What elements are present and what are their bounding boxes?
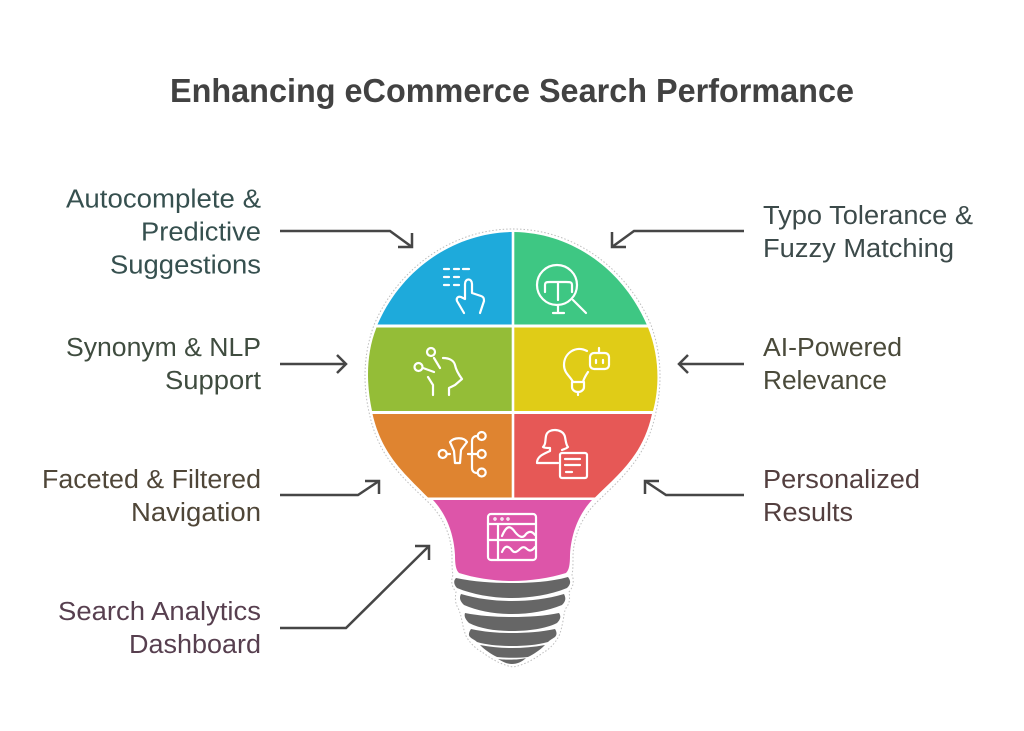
icon: person with document [537, 430, 587, 478]
label: search analytics: Search Analytics [58, 598, 261, 626]
icon: analytics dashboard window [488, 514, 536, 560]
arrow: typo tolerance [612, 231, 744, 247]
arrow: synonym [280, 355, 346, 373]
arrow: personalized [645, 481, 744, 495]
segment: search analytics (pink) [433, 500, 592, 581]
label: AI-powered: AI-Powered [763, 334, 902, 362]
label: fuzzy matching: Fuzzy Matching [763, 235, 954, 263]
icon: funnel with branches [439, 432, 486, 476]
icon: tapping hand [444, 269, 484, 313]
segment: autocomplete (blue) [378, 232, 512, 324]
bulb dotted outline [365, 229, 660, 667]
label: navigation: Navigation [131, 499, 261, 527]
arrow: search analytics [280, 546, 429, 628]
label: support: Support [165, 367, 261, 395]
arrow: faceted [280, 481, 379, 495]
label: faceted: Faceted & Filtered [42, 466, 261, 494]
bulb screw base [454, 577, 570, 664]
label: suggestions: Suggestions [110, 252, 261, 280]
segment: faceted navigation (orange) [372, 414, 512, 498]
label: autocomplete: Autocomplete & [66, 186, 261, 214]
title: Enhancing eCommerce Search Performance [170, 72, 854, 109]
icon: magnifier with letter T [537, 265, 586, 313]
label: results: Results [763, 499, 853, 527]
segment: personalized results (red) [514, 414, 652, 498]
label: synonym: Synonym & NLP [66, 334, 261, 362]
arrow: autocomplete [280, 231, 412, 247]
label: typo tolerance: Typo Tolerance & [763, 202, 973, 230]
label: relevance: Relevance [763, 367, 887, 395]
label: dashboard: Dashboard [129, 631, 261, 659]
segment: synonym and NLP (olive) [368, 328, 512, 411]
icon: bulb with robot [564, 348, 609, 395]
panel: light bulb [365, 229, 660, 667]
icon: head with nodes [414, 348, 462, 395]
label: personalized: Personalized [763, 466, 920, 494]
segment: AI relevance (yellow) [514, 328, 657, 411]
arrow: AI relevance [679, 355, 744, 373]
segment: typo tolerance (green) [514, 232, 647, 324]
label: predictive: Predictive [141, 218, 261, 246]
